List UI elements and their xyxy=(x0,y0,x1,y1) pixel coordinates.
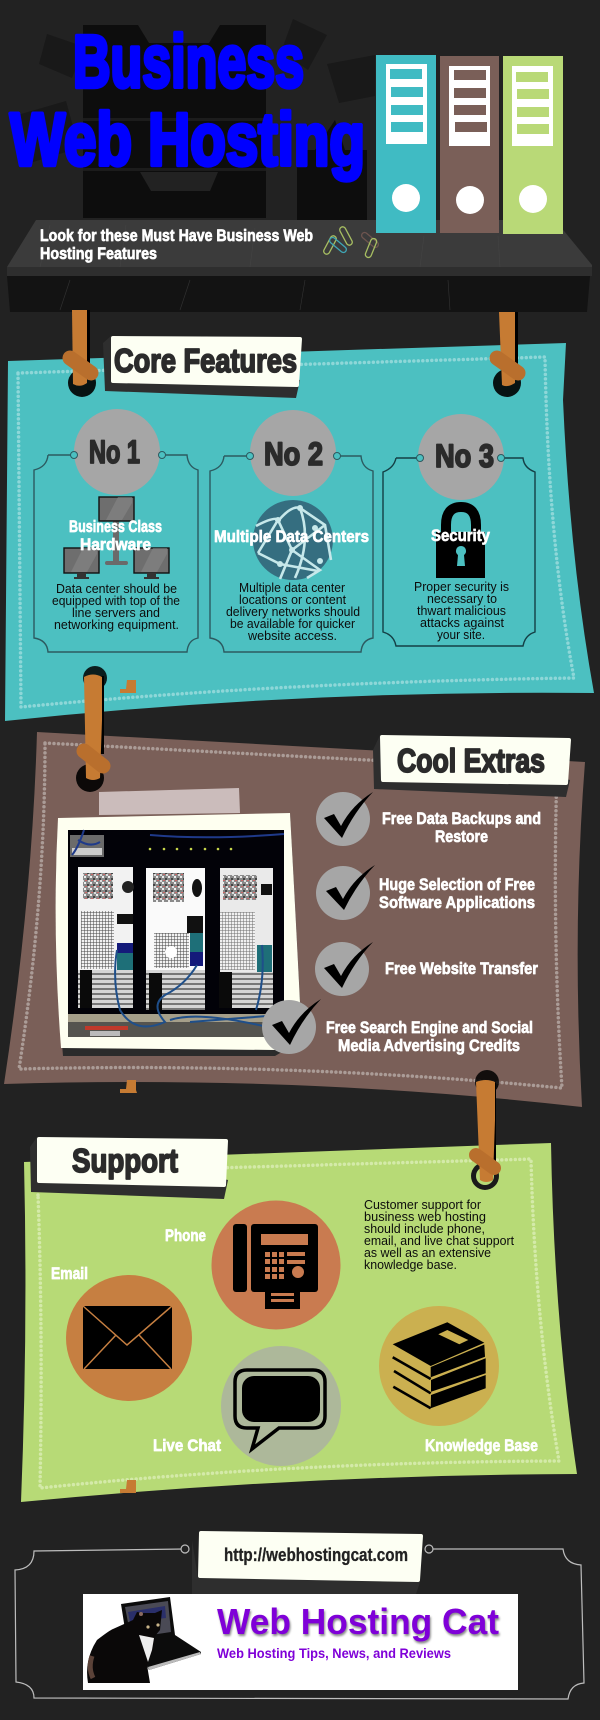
card: no 2: be available for quicker xyxy=(230,617,355,631)
card: no 3: your site. xyxy=(437,628,485,642)
heading tag: cool extras xyxy=(373,735,570,797)
heading tag: core features xyxy=(103,336,300,398)
checklist item 4 xyxy=(262,999,533,1055)
card: no 1: Business Class xyxy=(69,517,162,536)
checklist item 3: Free Website Transfer xyxy=(385,959,538,978)
card: no 3: thwart malicious xyxy=(417,604,506,618)
panel: core features xyxy=(5,343,594,721)
title xyxy=(10,20,365,181)
icon: padlock xyxy=(436,507,485,578)
icon: globe network xyxy=(253,500,333,580)
card: no 1: networking equipment. xyxy=(54,618,179,632)
card: no 1 xyxy=(34,409,198,652)
logo: web hosting cat: Web Hosting Cat xyxy=(217,1601,499,1642)
card: no 1: No 1 xyxy=(89,434,140,470)
title: Business xyxy=(73,20,304,103)
strap: core panel left xyxy=(68,310,96,397)
label: knowledge base: Knowledge Base xyxy=(425,1436,538,1455)
heading tag: core features: Core Features xyxy=(114,342,297,379)
title: Web Hosting xyxy=(10,98,365,181)
strap: cool panel left xyxy=(76,666,107,792)
url tag: http://webhostingcat.com xyxy=(224,1545,408,1565)
checklist item 2: Huge Selection of Free xyxy=(379,875,535,894)
support text xyxy=(364,1198,515,1272)
card: no 2: locations or content xyxy=(239,593,347,607)
photo: server rack xyxy=(56,813,302,1056)
binder: teal xyxy=(376,55,436,233)
strap stub xyxy=(120,1080,137,1093)
card: no 3: No 3 xyxy=(435,438,494,474)
card: no 2: Multiple data center xyxy=(239,581,345,595)
checklist item 1: Restore xyxy=(435,827,488,846)
strap stub xyxy=(120,1480,136,1493)
card: no 1: line servers and xyxy=(72,606,160,620)
icon: fax phone xyxy=(212,1200,340,1330)
checklist item 4: Free Search Engine and Social xyxy=(326,1018,533,1037)
header backdrop: dark cabinet and pinned notes xyxy=(14,19,375,220)
heading tag: cool extras: Cool Extras xyxy=(397,742,545,779)
logo: web hosting cat xyxy=(83,1594,518,1690)
card: no 2: delivery networks should xyxy=(226,605,360,619)
card: no 2 xyxy=(210,410,373,652)
panel: cool extras xyxy=(4,732,585,1107)
shelf text: Look for these Must Have Business Web xyxy=(40,226,313,245)
footer frame xyxy=(15,1545,584,1699)
icon: chat bubble xyxy=(221,1346,341,1466)
card: no 1: Hardware xyxy=(80,535,151,554)
card: no 3: necessary to xyxy=(427,592,497,606)
strap: support panel right xyxy=(471,1070,499,1190)
logo: web hosting cat: Web Hosting Tips, News, and Reviews xyxy=(217,1645,451,1661)
icon: cat with laptop xyxy=(87,1597,201,1683)
card: no 1: equipped with top of the xyxy=(52,594,180,608)
support text: should include phone, xyxy=(364,1222,485,1236)
checklist item 3 xyxy=(315,942,538,996)
strap stub xyxy=(120,680,136,693)
icon: network of monitors xyxy=(64,497,169,579)
card: no 3: Security xyxy=(431,526,490,545)
label: email: Email xyxy=(51,1264,88,1283)
icon: paperclips xyxy=(323,226,380,258)
icon: stack of books xyxy=(379,1306,499,1426)
heading tag: support xyxy=(30,1137,228,1199)
card: no 3 xyxy=(383,414,535,646)
tape xyxy=(99,788,240,815)
shelf text: Hosting Features xyxy=(40,244,157,263)
card: no 1: Data center should be xyxy=(56,582,177,596)
support text: email, and live chat support xyxy=(364,1234,515,1248)
label: live chat: Live Chat xyxy=(153,1436,221,1455)
icon: envelope xyxy=(66,1275,192,1401)
checklist item 4: Media Advertising Credits xyxy=(338,1036,520,1055)
card: no 2: No 2 xyxy=(264,436,323,472)
binder: green xyxy=(503,56,563,234)
shelf text xyxy=(40,226,313,263)
support text: business web hosting xyxy=(364,1210,486,1224)
strap: core panel right xyxy=(493,312,521,397)
binder: brown xyxy=(440,56,499,233)
checklist item 1 xyxy=(316,792,541,846)
card: no 3: attacks against xyxy=(420,616,505,630)
card: no 2: Multiple Data Centers xyxy=(214,527,369,546)
label: phone: Phone xyxy=(165,1226,206,1245)
card: no 3: Proper security is xyxy=(414,580,509,594)
url tag xyxy=(192,1533,421,1594)
heading tag: support: Support xyxy=(72,1142,178,1179)
panel: support xyxy=(21,1143,577,1502)
support text: knowledge base. xyxy=(364,1258,457,1272)
checklist item 2 xyxy=(316,865,535,920)
card: no 2: website access. xyxy=(247,629,337,643)
checklist item 1: Free Data Backups and xyxy=(382,809,541,828)
support text: as well as an extensive xyxy=(364,1246,491,1260)
support text: Customer support for xyxy=(364,1198,481,1212)
checklist item 2: Software Applications xyxy=(379,893,535,912)
shelf xyxy=(7,220,592,312)
